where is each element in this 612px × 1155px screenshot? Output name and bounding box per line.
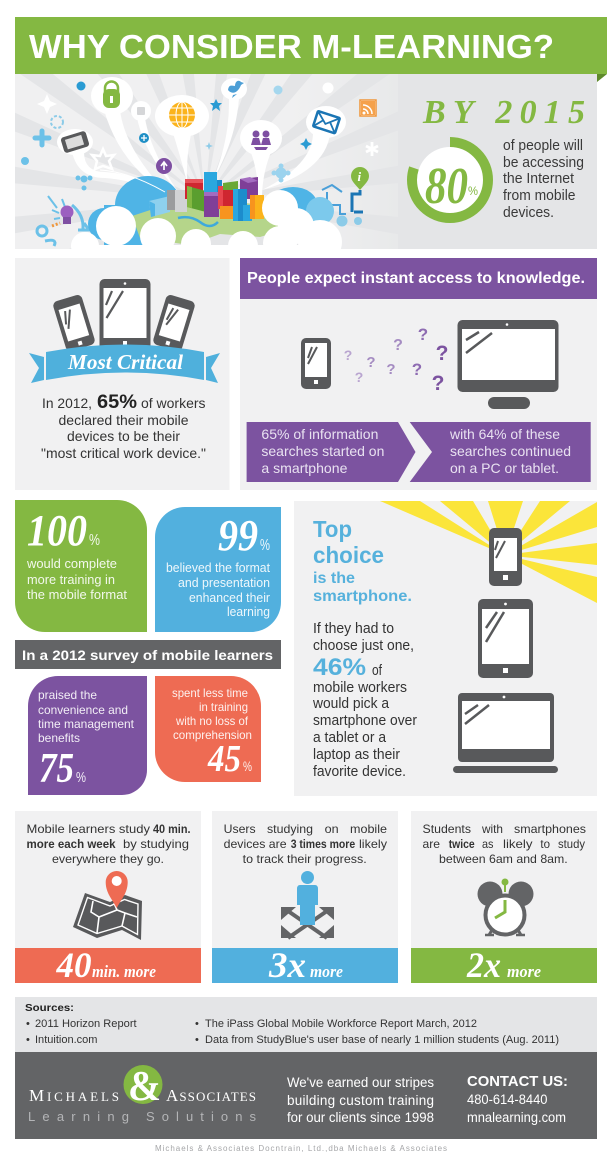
title: WHY CONSIDER M-LEARNING? <box>29 28 554 65</box>
stat bar: 3x <box>268 945 306 985</box>
text block: likely <box>359 837 387 851</box>
ribbon <box>29 344 220 383</box>
panel: instant access <box>240 258 597 490</box>
panel: survey 99%: % <box>260 537 270 554</box>
icon: info pin <box>322 167 369 226</box>
panel: 3x more <box>212 811 398 985</box>
sun rays <box>380 501 597 603</box>
tagline: for our clients since 1998 <box>287 1110 434 1125</box>
sources list: • <box>195 1034 199 1046</box>
panel: survey 99%: enhanced their <box>189 591 270 605</box>
panel: survey 100%: more training in <box>27 573 115 587</box>
text block: by studying <box>123 837 189 851</box>
text: 65% of workers: "most critical work device." <box>41 445 206 461</box>
text: mobile access: of people will <box>503 138 583 154</box>
panel: survey 75%: praised the <box>38 688 97 702</box>
panel: survey 100%: 100 <box>27 506 87 555</box>
panel: survey 45%: in training <box>199 700 248 714</box>
question marks: ? <box>355 369 363 385</box>
contact: CONTACT US: <box>467 1073 568 1090</box>
panel: survey 75%: 75 <box>39 746 74 792</box>
text block: are <box>422 837 440 851</box>
icon: laptop <box>453 693 558 773</box>
sources list: 2011 Horizon Report <box>35 1018 137 1030</box>
stat bar: more <box>507 962 541 981</box>
panel: survey 100%: % <box>89 532 100 549</box>
stat bar: 2x <box>466 945 501 985</box>
text: 65% of workers: of workers <box>141 395 206 411</box>
text block: studying <box>267 822 313 836</box>
text block: as <box>482 837 494 851</box>
text block: to <box>540 837 550 851</box>
heading: People expect instant access to knowledge. <box>247 270 585 287</box>
text: 65% of workers <box>41 392 206 461</box>
text: 46% of mobile workers: favorite device. <box>313 764 406 780</box>
text block: on <box>325 822 339 836</box>
text: mobile access <box>503 138 584 221</box>
panel: survey 99%: 99 <box>218 511 258 560</box>
text block: devices are <box>224 837 287 851</box>
text: 46% of mobile workers: smartphone over <box>313 713 417 729</box>
text: 65% of workers: declared their mobile <box>58 412 189 428</box>
tagline <box>287 1075 434 1125</box>
heading: is the <box>313 570 355 587</box>
logo: Learning <box>28 1109 129 1124</box>
panel: survey 45%: comprehension <box>173 728 252 742</box>
icon: map with pin <box>73 871 142 940</box>
ribbon text: Most Critical <box>67 350 183 374</box>
question marks <box>344 325 448 395</box>
text: 46% of mobile workers: 46% <box>313 654 366 681</box>
arrow: smartphone searches <box>247 422 416 482</box>
text: 46% of mobile workers: would pick a <box>312 696 390 712</box>
sources list: The iPass Global Mobile Workforce Report March, 2012 <box>205 1018 477 1030</box>
panel: survey 99%: and presentation <box>178 576 270 590</box>
text block: between 6am and 8am. <box>439 852 568 866</box>
arrow: continued searches <box>410 422 591 482</box>
icon: info pin: i <box>358 169 362 184</box>
arrow: smartphone searches: a smartphone <box>261 460 348 476</box>
question marks: ? <box>412 360 422 379</box>
white clouds <box>71 190 342 249</box>
icon: rss <box>360 100 376 116</box>
sources list: • <box>26 1018 30 1030</box>
panel: 2x more <box>411 811 597 985</box>
panel: most critical <box>15 258 230 490</box>
text block: 3 times more <box>291 837 355 851</box>
heading: smartphone. <box>313 588 412 605</box>
icon: light bulb <box>37 196 89 246</box>
heading: Top <box>313 516 352 542</box>
city blocks <box>149 172 264 221</box>
sources list: • <box>195 1018 199 1030</box>
text: 65% of workers: devices to be their <box>67 428 180 444</box>
icon: tablet <box>478 599 533 678</box>
panel: survey 45%: % <box>243 758 252 774</box>
logo: ASSOCIATES <box>166 1086 256 1105</box>
arrow: continued searches: with 64% of these <box>449 426 560 442</box>
stat bar <box>411 945 597 985</box>
sources list: Data from StudyBlue's user base of nearly 1 million students (Aug. 2011) <box>205 1034 559 1046</box>
text block: study <box>558 837 585 851</box>
panel: 40 min more <box>15 811 201 985</box>
arrow: continued searches: on a PC or tablet. <box>450 460 559 476</box>
text: 46% of mobile workers <box>312 621 417 780</box>
text: 65% of workers: In 2012, <box>42 395 92 411</box>
panel: survey 75%: % <box>76 769 86 786</box>
icon: lock <box>103 82 120 108</box>
icon: smartphone <box>301 338 331 389</box>
text: 46% of mobile workers: of <box>372 663 383 679</box>
panel: survey 75%: time management <box>38 717 135 731</box>
panel: by 2015 <box>412 94 585 221</box>
stat bar: 40 <box>56 945 92 985</box>
contact <box>467 1073 568 1125</box>
text: mobile access: from mobile <box>503 188 576 204</box>
icon: right phone <box>152 294 196 352</box>
sources heading: Sources: <box>25 1002 74 1014</box>
tagline: We've earned our stripes <box>287 1075 434 1090</box>
sources list <box>26 1018 559 1046</box>
arrow: continued searches: searches continued <box>450 443 571 459</box>
panel: survey 99% <box>155 507 281 632</box>
logo: & <box>128 1064 161 1110</box>
text block: mobile <box>350 822 387 836</box>
text: 46% of mobile workers: mobile workers <box>313 680 407 696</box>
text block: likely <box>503 837 532 851</box>
bubble stems <box>72 98 330 197</box>
panel: sources <box>15 997 597 1052</box>
text block <box>422 822 586 866</box>
panel: survey 45% <box>155 676 261 782</box>
panel: top choice <box>294 501 597 796</box>
blue clouds <box>88 176 334 245</box>
text block: twice <box>449 837 475 851</box>
donut chart: 80%: % <box>468 184 478 198</box>
text block: with <box>481 822 503 836</box>
logo: Solutions <box>146 1109 256 1124</box>
illustration: cloud city with app bubbles <box>15 74 378 249</box>
text: mobile access: devices. <box>503 205 554 221</box>
text block <box>224 822 387 866</box>
text block <box>26 822 190 866</box>
footer <box>15 1052 597 1139</box>
icon: small page <box>137 107 145 115</box>
text block: Mobile learners study <box>26 822 150 836</box>
panel: survey 100%: would complete <box>26 557 117 571</box>
stat bar: min. more <box>92 962 156 981</box>
panel: survey 100% <box>15 500 147 632</box>
icon: alarm clock <box>478 878 534 935</box>
icon: twitter bird <box>228 81 244 98</box>
credit line: Michaels & Associates Docntrain, Ltd.,dba Michaels & Associates <box>155 1144 447 1153</box>
contact: 480-614-8440 <box>467 1092 548 1107</box>
question marks: ? <box>418 325 428 344</box>
text: 46% of mobile workers: a tablet or a <box>313 730 387 746</box>
logo: MICHAELS <box>29 1086 119 1105</box>
title banner <box>15 17 607 82</box>
arrow: smartphone searches: searches started on <box>261 443 384 459</box>
panel: survey 99%: believed the format <box>166 561 271 575</box>
tagline: building custom training <box>287 1093 434 1108</box>
icon: game tablet <box>60 131 90 153</box>
sources list: • <box>26 1034 30 1046</box>
survey heading bar <box>15 640 281 669</box>
heading: BY 2015 <box>422 94 585 131</box>
text: mobile access: be accessing <box>503 155 584 171</box>
survey heading bar: In a 2012 survey of mobile learners <box>22 647 273 663</box>
stat bar <box>15 945 201 985</box>
panel: survey 75%: benefits <box>38 731 80 745</box>
panel: survey 99%: learning <box>227 605 270 619</box>
text block: everywhere they go. <box>52 852 164 866</box>
stat bar: more <box>310 962 343 981</box>
icon: person at crossroads <box>281 871 334 938</box>
ground <box>133 203 278 244</box>
panel: survey 100%: the mobile format <box>27 588 128 602</box>
stat bar <box>212 945 398 985</box>
icon: left phone <box>52 294 96 352</box>
icon: globe <box>169 102 195 128</box>
question marks: ? <box>436 342 448 365</box>
text block: smartphones <box>514 822 586 836</box>
text block: more each week <box>26 837 116 851</box>
donut chart: 80% <box>412 142 488 218</box>
text: 46% of mobile workers: choose just one, <box>313 638 414 654</box>
text block: to track their progress. <box>243 852 367 866</box>
icon: monitor <box>458 320 558 409</box>
text block: 40 min. <box>153 822 190 836</box>
text: 46% of mobile workers: If they had to <box>313 621 394 637</box>
question marks: ? <box>386 361 396 378</box>
panel: survey 45%: spent less time <box>172 686 248 700</box>
question marks: ? <box>432 372 444 395</box>
panel: survey 45%: with no loss of <box>175 714 249 728</box>
heading: choice <box>313 542 384 568</box>
icon: envelope <box>313 111 340 133</box>
panel: survey 45%: 45 <box>207 738 241 780</box>
text: 46% of mobile workers: laptop as their <box>313 747 400 763</box>
question marks: ? <box>393 337 403 354</box>
text block: Users <box>224 822 256 836</box>
panel: survey 75% <box>28 676 147 795</box>
question marks: ? <box>344 347 352 363</box>
heading <box>313 516 412 605</box>
text: 65% of workers: 65% <box>97 392 137 413</box>
contact: mnalearning.com <box>467 1110 566 1125</box>
arrow: smartphone searches: 65% of information <box>261 426 378 442</box>
icon: people <box>251 130 271 150</box>
text block: Students <box>422 822 471 836</box>
question marks: ? <box>366 354 376 371</box>
panel: hero <box>15 74 597 249</box>
logo <box>28 1064 256 1124</box>
text: mobile access: the Internet <box>503 171 574 187</box>
icon: tablet <box>100 279 150 351</box>
sources list: Intuition.com <box>35 1034 98 1046</box>
donut chart: 80%: 80 <box>425 158 468 215</box>
panel: survey 75%: convenience and <box>38 703 128 717</box>
icon: smartphone <box>489 528 522 586</box>
small decorative icons <box>21 82 378 190</box>
